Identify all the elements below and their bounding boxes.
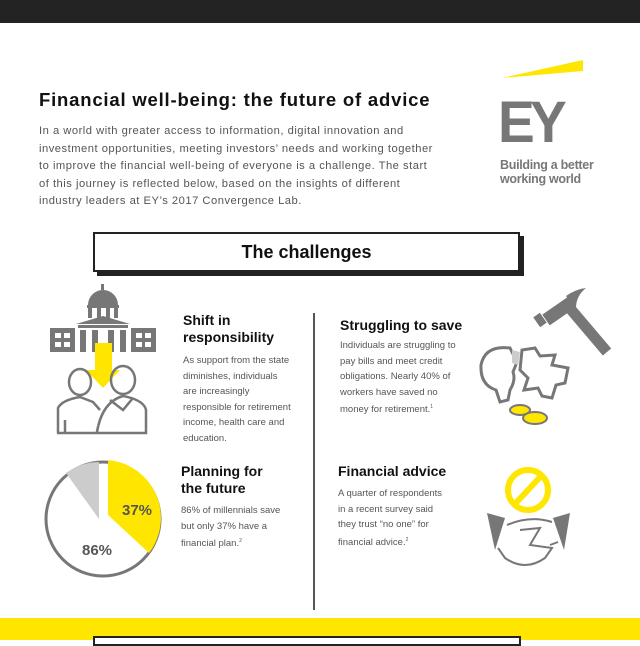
section: Planning for the future: financial plan.2 [181, 538, 242, 549]
intro text [39, 125, 433, 207]
section: Planning for the future: but only 37% have a [181, 520, 267, 532]
EY logo: EY [498, 90, 562, 155]
section: Struggling to save [340, 317, 462, 415]
section: Shift in responsibility: responsibility [183, 329, 274, 345]
section: Shift in responsibility: diminishes, individuals [183, 370, 278, 382]
icon: no-sign and handshake [487, 467, 570, 566]
section: Shift in responsibility: income, health care and [183, 417, 284, 428]
section: Planning for the future: Planning for [181, 463, 263, 479]
title: Financial well-being: the future of advice [39, 89, 430, 110]
section: Planning for the future: the future [181, 480, 246, 496]
icon: government to people [50, 284, 156, 434]
section: Financial advice: financial advice.2 [338, 536, 408, 548]
section: Shift in responsibility: Shift in [183, 312, 230, 328]
section: Financial advice: A quarter of respondents [338, 488, 442, 499]
pie chart [44, 460, 162, 578]
EY logo: Building a better [500, 158, 594, 172]
top bar [0, 0, 640, 23]
section: Struggling to save: Individuals are struggling to [340, 340, 456, 351]
section: Struggling to save: money for retirement.1 [340, 404, 433, 415]
EY logo: working world [500, 172, 581, 186]
icon: hammer and broken piggy bank [479, 288, 612, 425]
heading box: The challenges: The challenges [241, 242, 372, 262]
section: Planning for the future [181, 463, 280, 549]
section: Struggling to save: pay bills and meet credit [340, 356, 442, 366]
section: Financial advice [338, 463, 446, 548]
intro text: In a world with greater access to information, digital innovation and [39, 125, 404, 137]
section: Struggling to save: obligations. Nearly 40% of [340, 371, 450, 382]
next heading box (partial) [93, 636, 521, 646]
section: Financial advice: they trust “no one” for [338, 519, 429, 530]
divider [313, 313, 315, 610]
section: Shift in responsibility: responsible for retirement [183, 402, 291, 412]
section: Shift in responsibility [183, 312, 291, 444]
section: Struggling to save: Struggling to save [340, 317, 462, 333]
heading box: The challenges [93, 232, 524, 276]
section: Financial advice: in a recent survey said [338, 504, 433, 514]
section: Shift in responsibility: As support from the state [183, 355, 289, 366]
pie chart: 37% [122, 502, 152, 519]
section: Planning for the future: 86% of millennials save [181, 505, 280, 516]
section: Shift in responsibility: are increasingly [183, 386, 250, 397]
yellow band [0, 618, 640, 640]
intro text: to improve the financial well-being of everyone is a challenge. The start [39, 160, 427, 172]
EY logo [498, 60, 594, 186]
intro text: investment opportunities, meeting investors’ needs and working together [39, 142, 433, 154]
section: Shift in responsibility: education. [183, 432, 227, 444]
pie chart: 86% [82, 542, 112, 559]
section: Struggling to save: workers have saved no [340, 386, 438, 398]
intro text: of this journey is reflected below, based on the insights of different [39, 178, 400, 190]
section: Financial advice: Financial advice [338, 463, 446, 479]
intro text: industry leaders at EY’s 2017 Convergence Lab. [39, 195, 302, 207]
